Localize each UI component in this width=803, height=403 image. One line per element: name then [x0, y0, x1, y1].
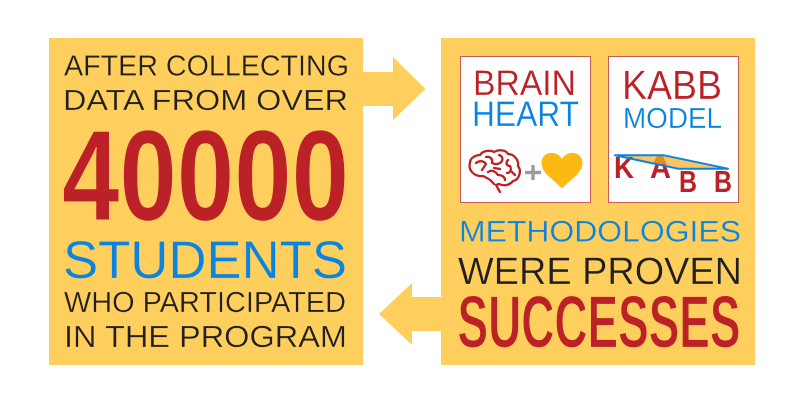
card: kabb model [608, 56, 738, 202]
panel: methodologies [441, 38, 755, 365]
letter a: A [650, 150, 671, 185]
text: kabb: KABB [622, 62, 722, 108]
text: after collecting: AFTER COLLECTING [64, 50, 349, 82]
balance fill [615, 155, 728, 169]
text: who participated: WHO PARTICIPATED [64, 287, 346, 319]
number: 40000: 40000 [62, 104, 349, 248]
letter k: K [614, 150, 635, 185]
icon: plus [525, 165, 541, 180]
letter b: B [714, 164, 732, 199]
letter b: B [679, 164, 697, 199]
text: students: STUDENTS [63, 231, 347, 290]
arrow: left back to students [379, 283, 441, 345]
apex tint [653, 156, 667, 164]
icon: brain [470, 150, 520, 192]
arrow: right to methodologies [363, 57, 426, 120]
text: heart: HEART [472, 95, 579, 134]
diagram: kabb balance [614, 150, 732, 199]
text: methodologies: METHODOLOGIES [459, 216, 741, 248]
icon: heart [542, 153, 582, 188]
text: brain: BRAIN [473, 64, 576, 103]
text: were proven: WERE PROVEN [458, 251, 742, 293]
text: in the program: IN THE PROGRAM [64, 320, 347, 354]
text: model: MODEL [623, 103, 722, 135]
balance outline [615, 155, 728, 169]
text: data from over: DATA FROM OVER [63, 85, 348, 117]
card: brain heart [460, 56, 590, 202]
panel: student data [49, 38, 363, 365]
